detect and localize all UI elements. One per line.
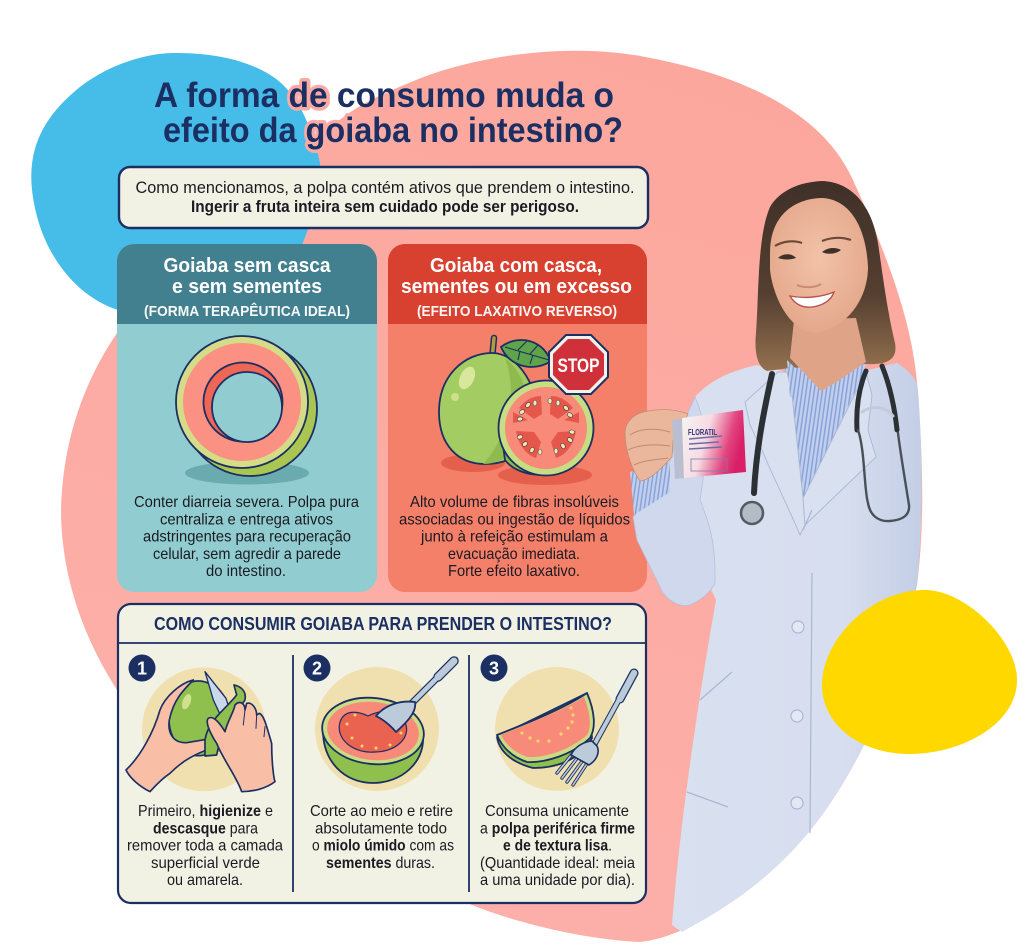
shirt collar bbox=[787, 360, 866, 400]
step 1 number badge bbox=[128, 654, 156, 682]
text: step 1: remover toda a camada bbox=[127, 838, 283, 855]
shirt bbox=[783, 355, 866, 498]
text: step 3: a polpa periférica firme bbox=[480, 820, 635, 837]
text: step 2: o miolo úmido com as bbox=[312, 838, 454, 855]
text: com casca: Forte efeito laxativo. bbox=[448, 563, 580, 580]
icon: hands peeling guava bbox=[126, 667, 275, 792]
blob: pink background bbox=[61, 51, 922, 942]
text: step 1: Primeiro, higienize e bbox=[138, 803, 273, 820]
coat details bbox=[687, 510, 812, 833]
title: A forma de consumo muda o bbox=[154, 76, 614, 115]
step 2 number badge bbox=[304, 654, 330, 682]
text: sem casca: centraliza e entrega ativos bbox=[160, 511, 333, 528]
text: step 3 bbox=[480, 803, 635, 889]
cuff bbox=[630, 458, 670, 515]
title: goiaba bbox=[306, 111, 410, 150]
intro callout: Ingerir a fruta inteira sem cuidado pode ser perigoso. bbox=[191, 197, 579, 216]
icon: guava with stop sign bbox=[439, 335, 608, 485]
intro callout bbox=[119, 167, 648, 228]
text: sem casca: do intestino. bbox=[206, 563, 286, 580]
icon: halved guava with spoon bbox=[315, 660, 455, 791]
step 3 number badge bbox=[480, 654, 508, 682]
text: sem casca bbox=[134, 494, 359, 580]
text: sem casca: Conter diarreia severa. Polpa pura bbox=[134, 494, 359, 511]
text: step 3: e de textura lisa. bbox=[503, 838, 612, 855]
text: com casca: associadas ou ingestão de líquidos bbox=[399, 511, 630, 528]
text: com casca: Alto volume de fibras insolúveis bbox=[410, 494, 619, 511]
step 1 number badge: 1 bbox=[137, 658, 147, 678]
step 3 number badge: 3 bbox=[489, 658, 499, 678]
blob: blue background bbox=[31, 53, 320, 310]
panel: sem casca bbox=[117, 244, 377, 592]
doctor holding product box bbox=[625, 181, 922, 932]
step 2 bbox=[304, 654, 455, 872]
product box: Floratil bbox=[672, 410, 746, 479]
panel heading: sem casca: (FORMA TERAPÊUTICA IDEAL) bbox=[144, 302, 350, 320]
text: step 2: sementes duras. bbox=[326, 855, 435, 872]
panel: como consumir bbox=[118, 604, 646, 903]
panel: com casca bbox=[388, 244, 647, 592]
text: step 3: (Quantidade ideal: meia bbox=[480, 855, 635, 872]
intro callout: Como mencionamos, a polpa contém ativos que prendem o intestino. bbox=[136, 178, 634, 197]
title bbox=[154, 76, 623, 150]
text: step 2 bbox=[310, 803, 454, 872]
stethoscope bbox=[741, 366, 909, 524]
title: de bbox=[289, 76, 328, 115]
text: sem casca: celular, sem agredir a parede bbox=[153, 546, 341, 563]
panel heading: com casca: (EFEITO LAXATIVO REVERSO) bbox=[417, 303, 617, 320]
text: step 3: a uma unidade por dia). bbox=[480, 872, 635, 889]
neck bbox=[790, 318, 866, 392]
step 3 bbox=[480, 654, 635, 889]
text: step 1 bbox=[127, 803, 283, 889]
text: step 1: superficial verde bbox=[151, 855, 260, 872]
panel heading: com casca: Goiaba com casca, bbox=[430, 255, 602, 277]
panel heading: sem casca: Goiaba sem casca bbox=[164, 255, 331, 277]
face bbox=[770, 198, 868, 333]
text: step 1: descasque para bbox=[153, 820, 258, 837]
icon: guava slice with fork bbox=[495, 667, 634, 791]
panel heading: com casca bbox=[401, 255, 632, 320]
blob: yellow bbox=[822, 590, 1017, 754]
hand bbox=[625, 410, 688, 481]
sleeve bbox=[633, 397, 715, 606]
step 2 number badge: 2 bbox=[312, 658, 322, 678]
step 1 bbox=[126, 654, 283, 889]
panel heading: sem casca: e sem sementes bbox=[172, 276, 322, 298]
panel heading: como consumir: COMO CONSUMIR GOIABA PARA PRENDER O INTESTINO? bbox=[154, 613, 612, 634]
text: com casca bbox=[399, 494, 630, 580]
text: step 1: ou amarela. bbox=[167, 872, 243, 889]
panel heading: sem casca bbox=[144, 255, 350, 320]
text: sem casca: adstringentes para recuperação bbox=[143, 529, 351, 546]
panel heading: com casca: sementes ou em excesso bbox=[401, 276, 632, 298]
icon: guava with stop sign: STOP bbox=[558, 356, 600, 377]
text: com casca: evacuação imediata. bbox=[448, 546, 580, 563]
icon: peeled guava ring bbox=[176, 336, 317, 484]
text: com casca: junto à refeição estimulam a bbox=[420, 529, 608, 546]
collar and lapels bbox=[745, 372, 876, 535]
product box: Floratil: FLORATIL bbox=[688, 428, 717, 437]
hair bbox=[755, 181, 895, 371]
text: step 2: Corte ao meio e retire bbox=[310, 803, 453, 820]
text: step 2: absolutamente todo bbox=[315, 820, 447, 837]
title: efeito da goiaba no intestino? bbox=[163, 111, 623, 150]
coat body bbox=[660, 363, 922, 932]
text: step 3: Consuma unicamente bbox=[485, 803, 629, 820]
